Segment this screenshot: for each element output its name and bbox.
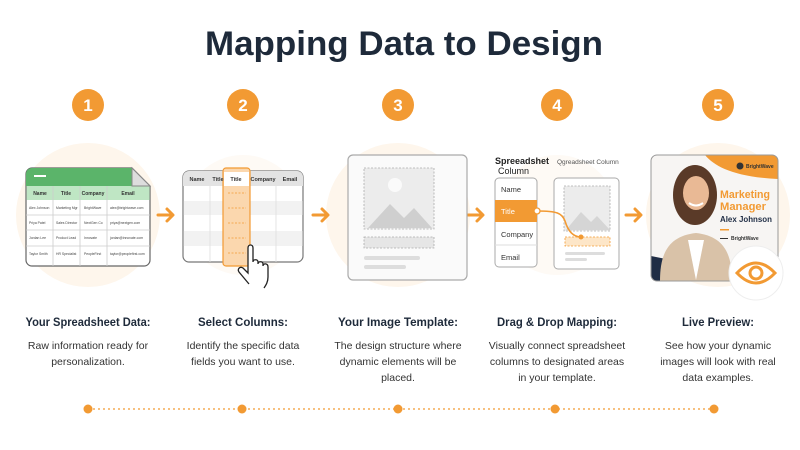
icon: spreadsheet: Priya Patel xyxy=(29,221,46,225)
headings: Your Image Template: xyxy=(338,315,458,329)
icon: spreadsheet: Company xyxy=(82,191,105,197)
step numbers: 3 xyxy=(393,96,403,115)
step numbers: 5 xyxy=(713,96,723,115)
icon: spreadsheet: PeopleFirst xyxy=(84,252,101,256)
step numbers xyxy=(72,89,734,121)
icon: spreadsheet xyxy=(26,168,150,266)
icon: drag and drop: Company xyxy=(501,230,533,239)
headings: Your Spreadsheet Data: xyxy=(26,315,150,329)
icon: drag and drop: Spreeadshet xyxy=(495,156,549,166)
icon: spreadsheet: jordan@innovate.com xyxy=(109,236,143,240)
icon: live preview card: Manager xyxy=(720,201,767,213)
headings: Drag & Drop Mapping: xyxy=(497,315,617,329)
icon: spreadsheet: priya@nextgen.com xyxy=(110,221,140,225)
icon: spreadsheet: BrightWave xyxy=(84,206,102,210)
icon: live preview card: Marketing xyxy=(720,189,770,201)
descriptions: Identify the specific data xyxy=(187,340,299,352)
icon: spreadsheet: alex@brightwave.com xyxy=(110,206,144,210)
icon: spreadsheet: HR Specialist xyxy=(56,252,76,256)
step numbers: 1 xyxy=(83,96,93,115)
headings: Live Preview: xyxy=(682,315,754,329)
descriptions: data examples. xyxy=(682,372,754,384)
icon: live preview card: BrightWave xyxy=(731,236,759,242)
icon: spreadsheet: Email xyxy=(121,191,135,197)
descriptions: personalization. xyxy=(51,356,125,368)
descriptions: See how your dynamic xyxy=(665,340,771,352)
descriptions: columns to designated areas xyxy=(490,356,624,368)
headings: Select Columns: xyxy=(198,315,288,329)
descriptions: placed. xyxy=(381,372,415,384)
icon: spreadsheet: Alex Johnson xyxy=(29,206,49,210)
icon: spreadsheet: Title xyxy=(61,191,71,197)
descriptions: in your template. xyxy=(518,372,596,384)
descriptions: The design structure where xyxy=(334,340,462,352)
icon: drag and drop: Column xyxy=(498,166,529,176)
descriptions: fields you want to use. xyxy=(191,356,295,368)
icon: select columns xyxy=(183,168,303,288)
background glows xyxy=(16,143,790,287)
icon: drag and drop: Title xyxy=(501,207,515,216)
icon: spreadsheet: NextGen Co xyxy=(84,221,103,225)
icon: spreadsheet: taylor@peoplefirst.com xyxy=(110,252,145,256)
icon: spreadsheet: Product Lead xyxy=(56,236,76,240)
icon: spreadsheet: Taylor Smith xyxy=(29,252,48,256)
icon: select columns: Email xyxy=(283,177,298,183)
arrows xyxy=(158,209,641,221)
icon: select columns: Title xyxy=(212,177,224,183)
title: Mapping Data to Design xyxy=(205,25,603,63)
icon: live preview card xyxy=(651,155,783,300)
icon: spreadsheet: Marketing Mgr xyxy=(56,206,79,210)
icon: spreadsheet: Name xyxy=(33,191,47,197)
icon: image template xyxy=(348,155,467,280)
icon: spreadsheet: Jordan Lee xyxy=(29,236,46,240)
descriptions xyxy=(28,340,776,384)
icon: drag and drop: Qgreadsheet Column xyxy=(557,159,619,166)
descriptions: dynamic elements will be xyxy=(340,356,457,368)
icon: live preview card: Alex Johnson xyxy=(720,214,772,224)
icon: select columns: Company xyxy=(250,177,276,183)
icon: drag and drop xyxy=(495,156,619,269)
icon: spreadsheet: Sales Director xyxy=(56,221,78,225)
step numbers: 2 xyxy=(238,96,248,115)
icon: spreadsheet: Innovate xyxy=(84,236,97,240)
icon: drag and drop: Name xyxy=(501,185,521,194)
descriptions: Raw information ready for xyxy=(28,340,149,352)
descriptions: Visually connect spreadsheet xyxy=(489,340,625,352)
icon: drag and drop: Email xyxy=(501,253,520,262)
icon: live preview card: BrightWave xyxy=(746,164,774,170)
timeline xyxy=(84,404,718,414)
icon: select columns: Name xyxy=(190,177,204,183)
headings xyxy=(26,315,754,329)
step numbers: 4 xyxy=(552,96,562,115)
icon: select columns: Title xyxy=(230,177,242,183)
descriptions: images will look with real xyxy=(660,356,776,368)
